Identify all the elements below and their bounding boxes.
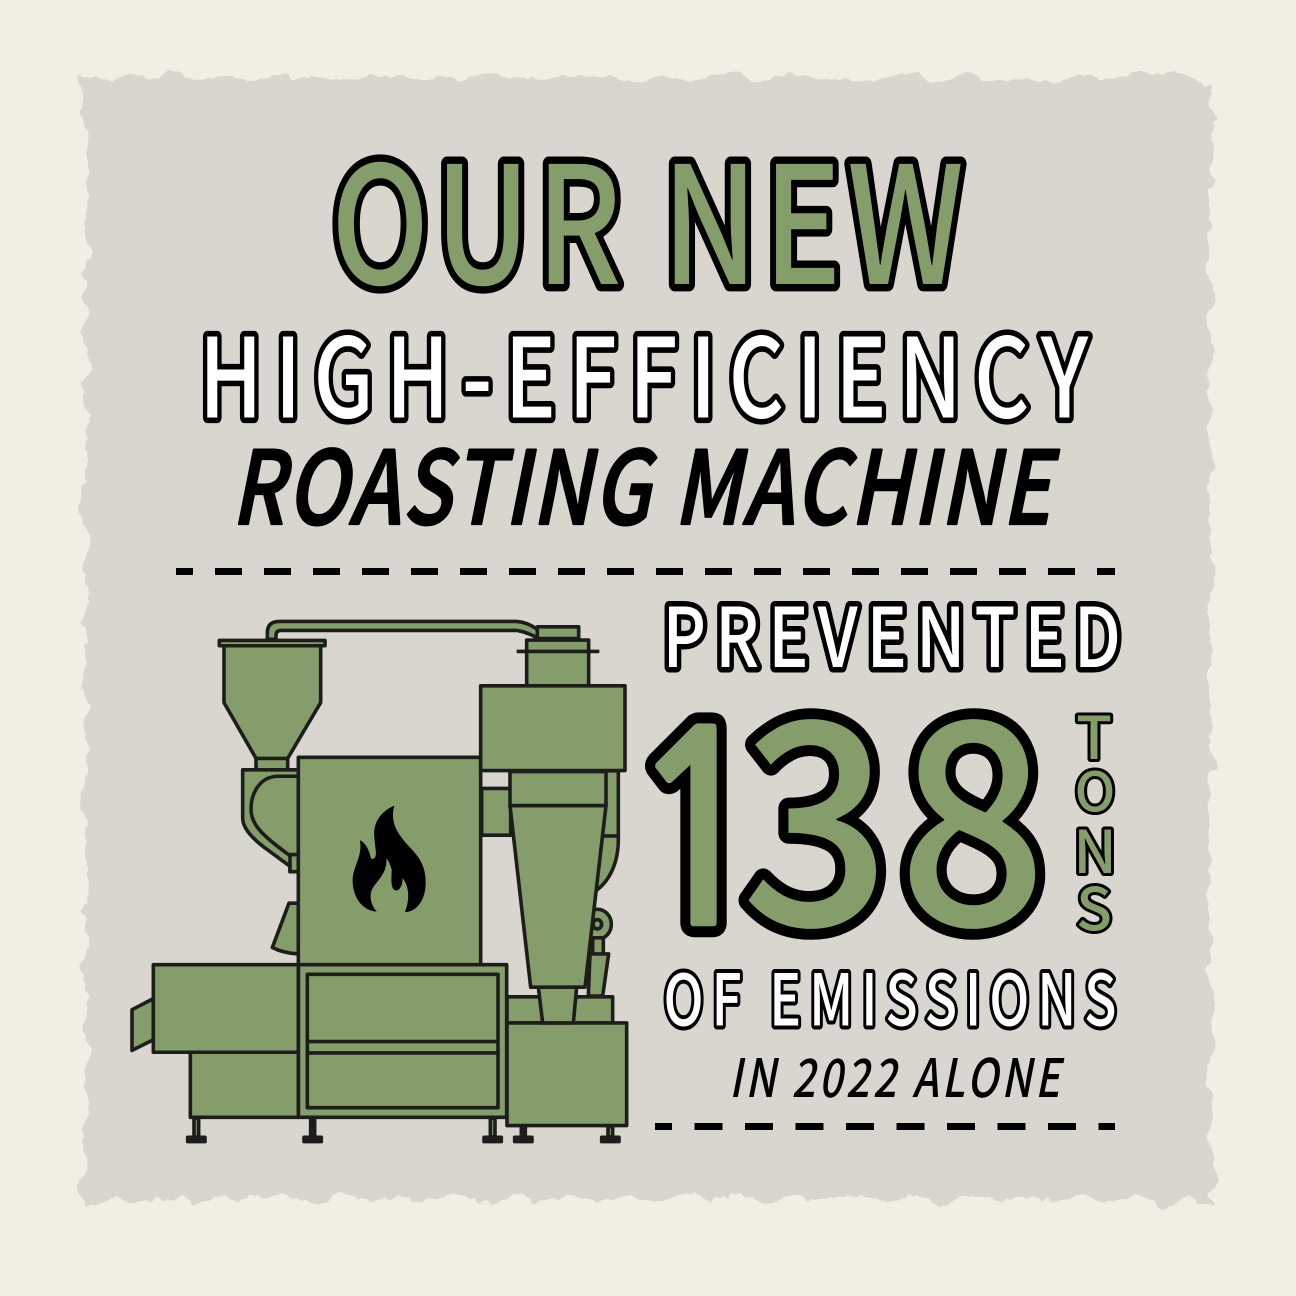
divider bottom <box>655 1123 1115 1130</box>
vertical label: TONS: S <box>1076 862 1112 947</box>
title: OUR NEW: OUR NEW <box>331 95 964 331</box>
pipe <box>267 621 537 639</box>
motor <box>583 909 611 996</box>
heading: ROASTING MACHINE: ROASTING MACHINE <box>231 408 1060 554</box>
cyclone box <box>481 686 625 771</box>
cooling tray <box>132 965 298 1117</box>
illustration: roasting machine <box>132 621 627 1142</box>
big number: 138: 3 <box>741 599 891 1007</box>
cyclone <box>510 772 606 1023</box>
big number: 138 <box>624 599 1047 1007</box>
text: IN 2022 ALONE: IN 2022 ALONE <box>729 1036 1065 1113</box>
vertical label: TONS: T <box>1076 691 1112 776</box>
big number: 138: 8 <box>898 599 1047 1007</box>
rear unit <box>507 997 627 1126</box>
machine legs <box>188 1118 619 1142</box>
main housing <box>298 757 481 965</box>
discharge chute <box>272 903 298 954</box>
feed chute <box>243 770 298 872</box>
hopper <box>219 640 325 770</box>
heading: HIGH-EFFICIENCY: HIGH-EFFICIENCY <box>199 291 1089 450</box>
big number: 138: 1 <box>624 702 772 966</box>
vertical label: TONS: O <box>1075 748 1115 827</box>
text: PREVENTED: PREVENTED <box>662 572 1121 691</box>
lower cabinet <box>298 965 507 1117</box>
divider top <box>176 568 1115 575</box>
vertical label: TONS: N <box>1073 805 1117 890</box>
icon: flame <box>353 806 426 912</box>
vertical label: TONS <box>1073 691 1117 947</box>
right duct <box>482 771 618 891</box>
torn paper panel <box>78 73 1217 1209</box>
text: OF EMISSIONS: OF EMISSIONS <box>664 944 1116 1047</box>
